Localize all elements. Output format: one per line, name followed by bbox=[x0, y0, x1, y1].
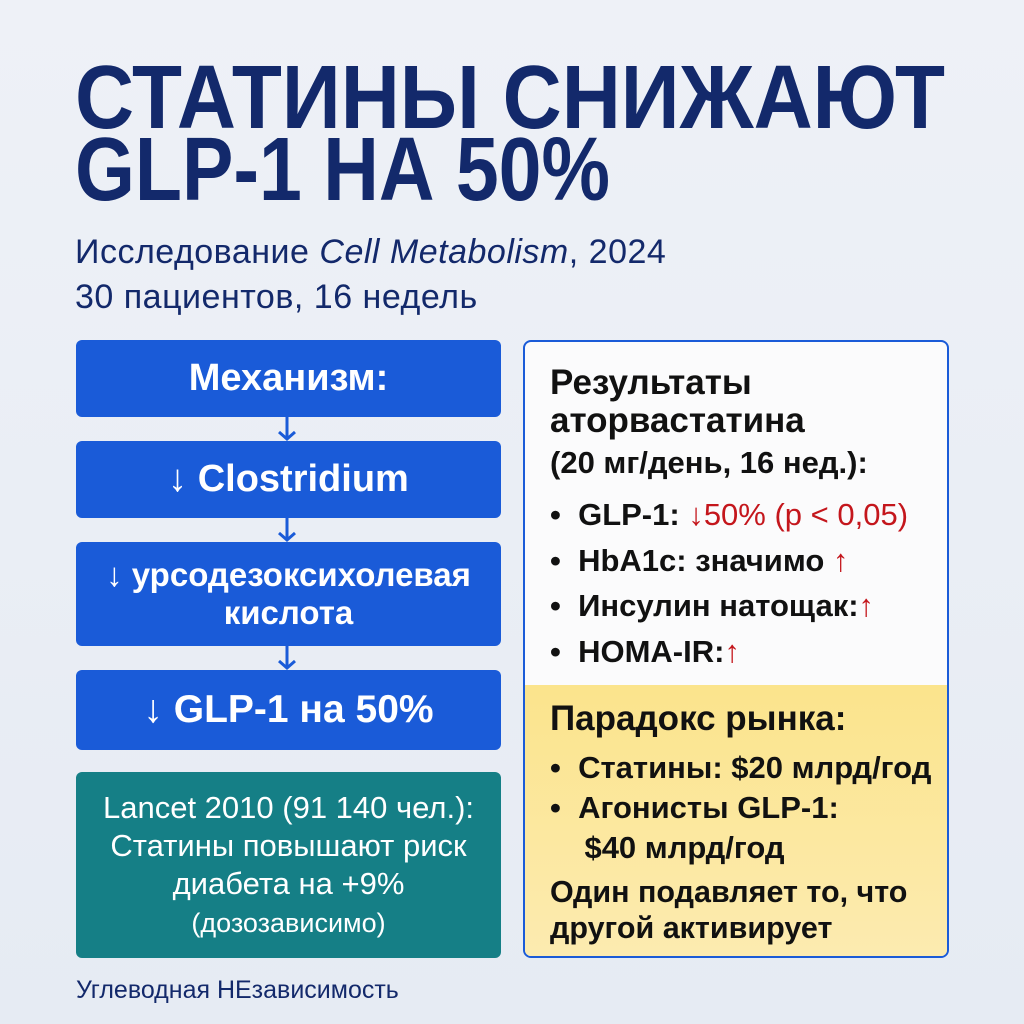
results heading bbox=[550, 363, 868, 480]
subtitle: Исследование Cell Metabolism, 2024 bbox=[75, 233, 666, 271]
box: acid: кислота bbox=[224, 594, 353, 631]
box: GLP-1: ↓ GLP-1 на 50% bbox=[143, 688, 434, 731]
box: lancet bbox=[76, 772, 501, 958]
box: lancet: (дозозависимо) bbox=[191, 908, 386, 938]
box: lancet: Lancet 2010 (91 140 чел.): bbox=[103, 790, 474, 824]
paradox conclusion: другой активирует bbox=[550, 911, 832, 945]
paradox bullets: $40 млрд/год bbox=[584, 830, 785, 865]
box: mechanism bbox=[76, 340, 501, 417]
arrow 3 bbox=[278, 646, 296, 670]
box: lancet: Статины повышают риск bbox=[110, 828, 467, 862]
paradox conclusion: Один подавляет то, что bbox=[550, 875, 907, 909]
box: mechanism: Механизм: bbox=[189, 357, 388, 399]
results heading: (20 мг/день, 16 нед.): bbox=[550, 445, 868, 480]
results heading: аторвастатина bbox=[550, 401, 805, 440]
box: GLP-1 bbox=[76, 670, 501, 750]
results bullets: • HOMA-IR:↑ bbox=[550, 634, 740, 668]
arrow 1 bbox=[278, 417, 296, 441]
title bbox=[75, 48, 945, 220]
box: lancet: диабета на +9% bbox=[173, 866, 404, 900]
subtitle: 30 пациентов, 16 недель bbox=[75, 278, 478, 316]
panel: results bbox=[523, 340, 949, 958]
results bullets bbox=[550, 497, 908, 668]
results bullets: • GLP-1: ↓50% (p < 0,05) bbox=[550, 497, 908, 532]
title: СТАТИНЫ СНИЖАЮТ bbox=[75, 48, 945, 148]
title: GLP-1 НА 50% bbox=[75, 120, 610, 220]
results bullets: • HbA1c: значимо ↑ bbox=[550, 542, 848, 578]
paradox conclusion bbox=[550, 875, 907, 945]
results heading: Результаты bbox=[550, 363, 752, 402]
results bullets: • Инсулин натощак:↑ bbox=[550, 588, 874, 623]
box: acid: ↓ урсодезоксихолевая bbox=[106, 556, 471, 593]
yellow section bbox=[525, 685, 947, 956]
box: clostridium: ↓ Clostridium bbox=[168, 458, 409, 500]
paradox bullets: • Статины: $20 млрд/год bbox=[550, 750, 931, 785]
paradox heading: Парадокс рынка: bbox=[550, 699, 846, 738]
paradox bullets: • Агонисты GLP-1: bbox=[550, 790, 839, 825]
subtitle bbox=[75, 233, 666, 316]
footer: Углеводная НЕзависимость bbox=[76, 976, 399, 1004]
box: acid bbox=[76, 542, 501, 646]
paradox bullets bbox=[550, 750, 931, 865]
box: clostridium bbox=[76, 441, 501, 518]
arrow 2 bbox=[278, 518, 296, 542]
